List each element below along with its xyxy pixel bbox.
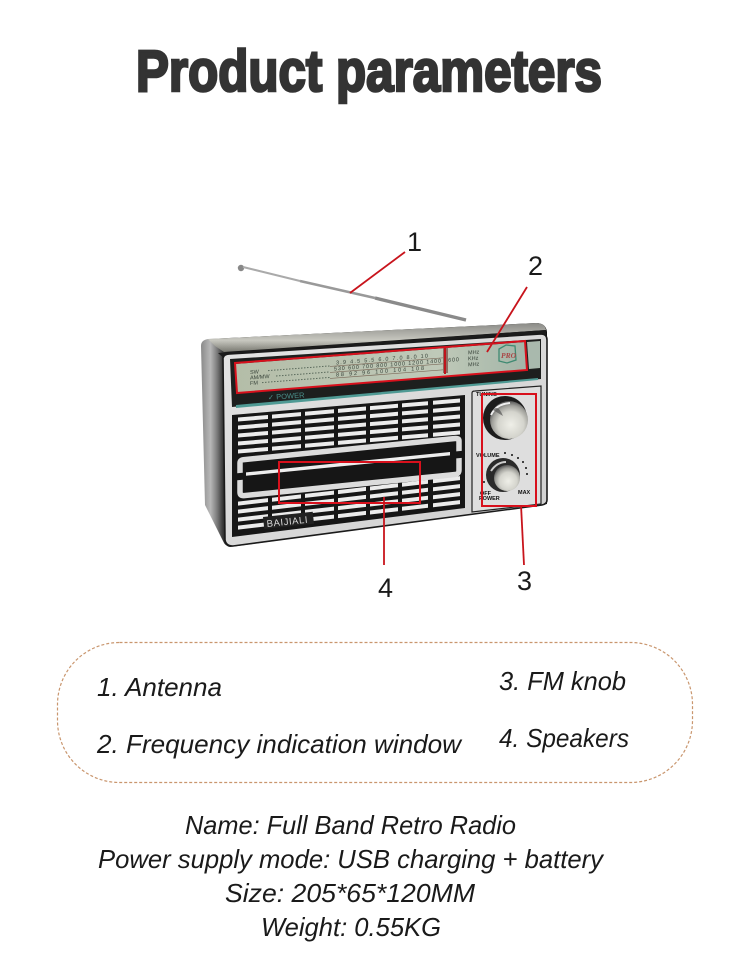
brand badge: BAIJIALI: [266, 515, 308, 530]
PRO logo: PRO: [501, 351, 517, 360]
control panel: [472, 386, 541, 512]
speaker grille: [232, 395, 465, 537]
radio product photo: [201, 265, 547, 547]
dial scale window: MHz: [468, 362, 480, 368]
brand badge: [263, 512, 314, 530]
face plate: [223, 334, 547, 546]
legend item 4: 4. Speakers: [499, 723, 629, 753]
spec: name: Name: Full Band Retro Radio: [185, 810, 516, 840]
volume knob: OFF: [480, 491, 492, 497]
dial scale window: 88 92 96 100 104 108: [336, 366, 424, 378]
red highlight box: window: [235, 341, 527, 393]
callout number 2: 2: [528, 251, 543, 281]
callout line 1: [350, 252, 405, 293]
dark trim: [218, 330, 546, 360]
dial scale window: AM/MW: [250, 374, 270, 381]
red highlight box: knobs: [482, 394, 536, 506]
dial window recess: [230, 339, 541, 407]
volume knob: MAX: [518, 490, 531, 496]
dial scale window: SW: [250, 369, 260, 376]
legend panel: [58, 642, 692, 782]
specifications text: [98, 810, 605, 942]
spec: weight: Weight: 0.55KG: [261, 912, 441, 942]
dial scale window: KHz: [468, 356, 479, 362]
dial scale window: [235, 341, 540, 393]
lower slats: [238, 476, 460, 530]
callout line 2: [487, 287, 527, 352]
dial scale window: 3.9 4.5 5.5 6.0 7.0 8.0 10: [336, 353, 428, 366]
callout number 1: 1: [407, 227, 422, 257]
tuning knob: TUNING: [476, 392, 497, 398]
dial scale window: MHz: [468, 350, 480, 356]
upper slats: [238, 398, 460, 454]
legend item 2: 2. Frequency indication window: [96, 729, 463, 759]
red divider: [444, 348, 446, 374]
callout number 4: 4: [378, 573, 393, 603]
dial scale window: 530 600 700 800 1000 1200 1400 1600: [334, 357, 459, 373]
title: Product parameters: [136, 39, 602, 104]
tuning knob: [476, 392, 528, 440]
callout line 3: [521, 505, 524, 565]
PRO logo: [499, 345, 517, 363]
antenna: [238, 265, 466, 320]
red highlight box: speaker: [279, 462, 420, 503]
radio body: [201, 323, 547, 547]
teal strip: [236, 378, 538, 408]
dial scale window: FM: [250, 380, 258, 387]
volume knob: VOLUME: [476, 453, 500, 459]
volume knob: POWER: [479, 496, 500, 502]
callout line 4: [383, 497, 385, 565]
spec: power: Power supply mode: USB charging + battery: [98, 844, 605, 874]
legend item 1: 1. Antenna: [97, 672, 222, 702]
legend item 3: 3. FM knob: [499, 666, 626, 696]
power label: ✓ POWER: [268, 390, 305, 402]
volume knob: [476, 452, 531, 502]
spec: size: Size: 205*65*120MM: [225, 878, 475, 908]
callout number 3: 3: [517, 566, 532, 596]
top band: [208, 323, 546, 352]
grille centre frame: [240, 438, 459, 496]
